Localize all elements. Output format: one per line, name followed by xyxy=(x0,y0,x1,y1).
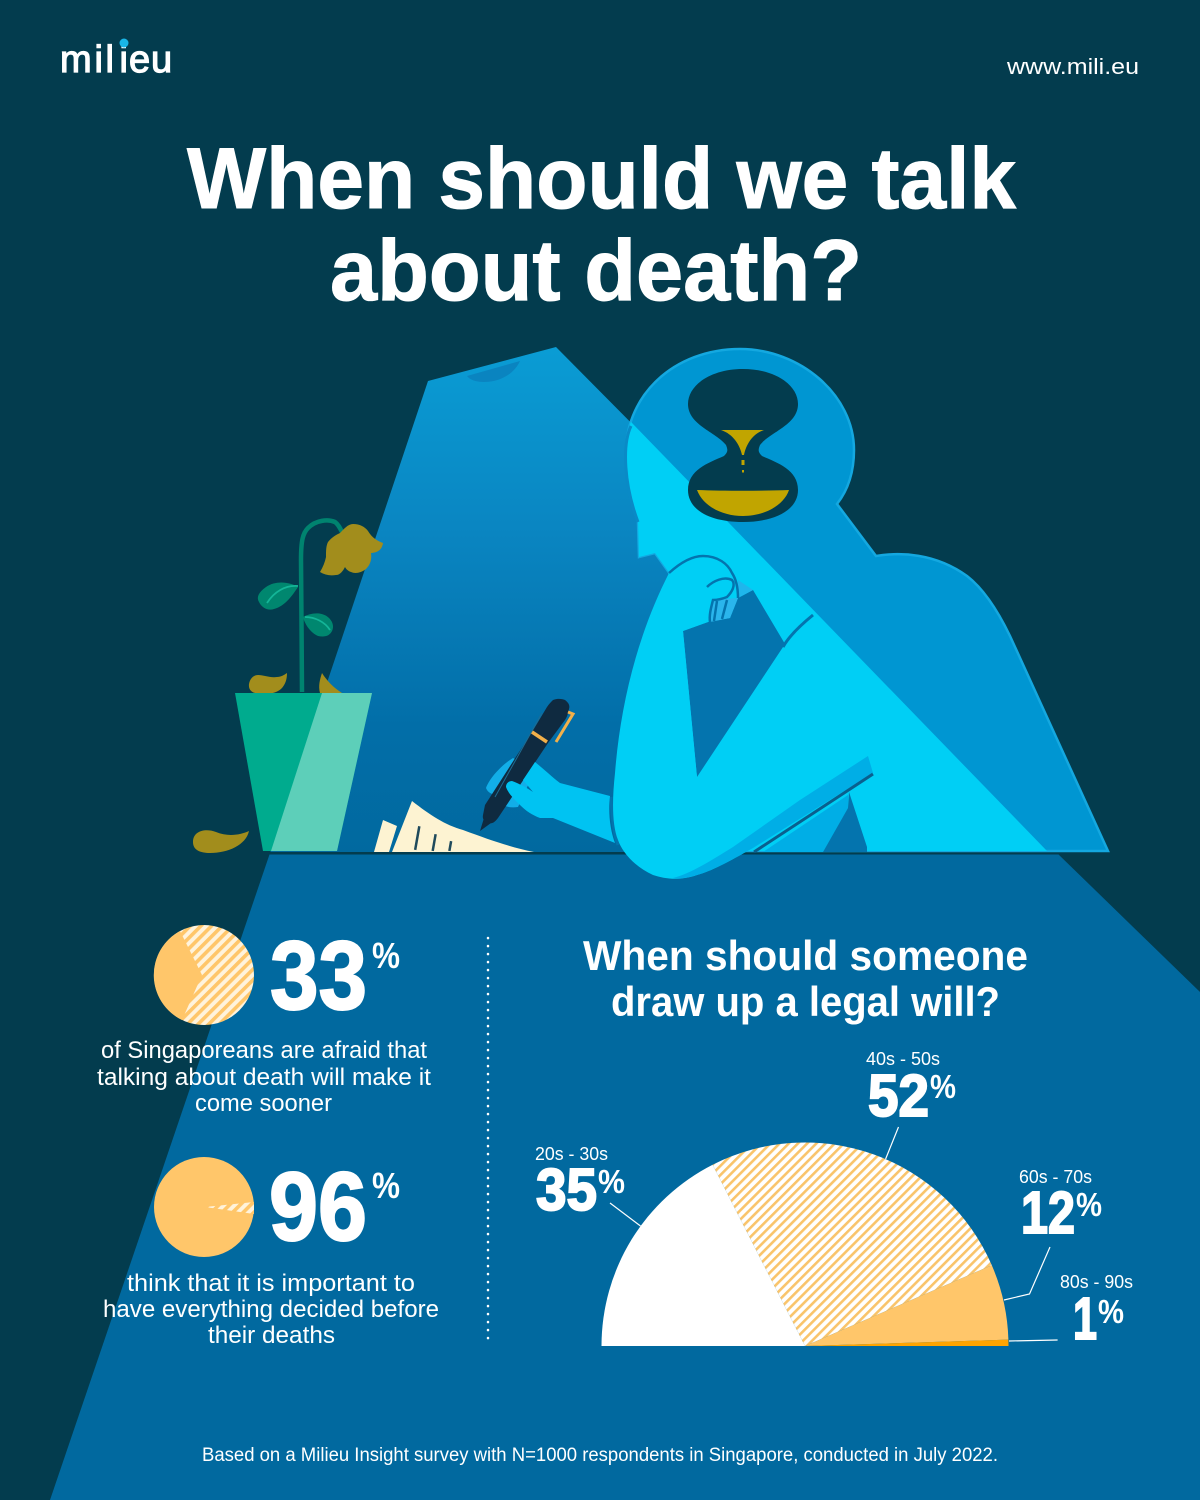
percent sign: % xyxy=(372,1165,400,1206)
bent arm and fist xyxy=(613,556,873,879)
caption 33 xyxy=(97,1037,431,1117)
chart heading: When should someone xyxy=(583,932,1028,979)
caption 96 xyxy=(103,1270,439,1349)
label: 20s-30s: 20s - 30s xyxy=(535,1144,608,1164)
head rim xyxy=(626,426,638,522)
label: 60s-70s: 60s - 70s xyxy=(1019,1167,1092,1187)
illustration: wilted plant in pot xyxy=(193,520,383,853)
caption 96: have everything decided before xyxy=(103,1296,439,1323)
title: When should we talk xyxy=(187,131,1016,227)
wilted flower xyxy=(320,524,383,575)
label: 80s-90s xyxy=(1009,1272,1133,1352)
hourglass xyxy=(688,369,798,522)
segment 60s-70s xyxy=(805,1265,1008,1346)
label: 80s-90s: % xyxy=(1098,1293,1124,1330)
percent sign: % xyxy=(372,935,400,976)
fist lines xyxy=(669,556,738,622)
stat: 96 percent xyxy=(103,1152,439,1349)
caption 33: come sooner xyxy=(195,1090,332,1117)
caption 96: think that it is important to xyxy=(127,1270,415,1297)
title: about death? xyxy=(330,223,862,319)
lit part of body xyxy=(627,422,1047,851)
illustration: paper xyxy=(374,801,534,852)
collar xyxy=(783,615,813,647)
arm rim xyxy=(611,797,618,845)
label: 60s-70s: % xyxy=(1076,1186,1102,1223)
caption 33: of Singaporeans are afraid that xyxy=(101,1037,427,1064)
arm underside xyxy=(673,756,873,878)
chart heading xyxy=(583,932,1028,1025)
segment 40s-50s xyxy=(713,1142,992,1346)
illustration: person with hourglass in head xyxy=(480,349,1108,879)
table line xyxy=(262,852,1108,854)
pen xyxy=(480,699,573,831)
value 96: 96 xyxy=(269,1152,367,1261)
pie chart 33 xyxy=(154,925,254,1025)
label: 20s-30s: % xyxy=(598,1163,625,1200)
label: 60s-70s xyxy=(1004,1167,1102,1300)
plant stem xyxy=(301,520,342,692)
caption 96: their deaths xyxy=(208,1322,335,1349)
chart heading: draw up a legal will? xyxy=(611,978,1000,1025)
leaves xyxy=(258,582,333,636)
fallen petals xyxy=(193,673,342,853)
segment 20s-30s xyxy=(602,1165,805,1346)
value 33: 33 xyxy=(270,921,367,1030)
footer source note: Based on a Milieu Insight survey with N=1000 respondents in Singapore, conducted in July 2022. xyxy=(202,1445,998,1466)
gap below arm xyxy=(763,792,867,852)
label: 20s-30s xyxy=(535,1144,640,1226)
body in shadow xyxy=(626,349,1108,851)
stat: 33 percent xyxy=(97,921,431,1117)
semicircle chart xyxy=(602,1142,1008,1346)
logo: milieu xyxy=(60,39,172,81)
caption 33: talking about death will make it xyxy=(97,1064,431,1091)
label: 40s-50s xyxy=(866,1049,956,1159)
label: 40s-50s: % xyxy=(930,1068,956,1105)
background light beam xyxy=(50,347,1200,1500)
label: 20s-30s: 35 xyxy=(536,1157,597,1223)
writing hand back xyxy=(486,758,535,807)
website url: www.mili.eu xyxy=(1006,54,1139,79)
label: 80s-90s: 80s - 90s xyxy=(1060,1272,1133,1292)
pie chart 96 xyxy=(154,1157,254,1257)
segment 80s-90s xyxy=(805,1340,1008,1346)
neck shadow xyxy=(738,580,753,598)
gap between arm and torso xyxy=(683,590,785,777)
writing hand and forearm xyxy=(506,762,615,843)
label: 80s-90s: 1 xyxy=(1073,1286,1097,1352)
label: 40s-50s: 52 xyxy=(868,1063,929,1129)
pot xyxy=(235,693,372,851)
label: 40s-50s: 40s - 50s xyxy=(866,1049,940,1069)
title xyxy=(187,131,1016,319)
sleeve line xyxy=(754,774,873,852)
sand xyxy=(697,430,789,516)
label: 60s-70s: 12 xyxy=(1021,1180,1075,1246)
